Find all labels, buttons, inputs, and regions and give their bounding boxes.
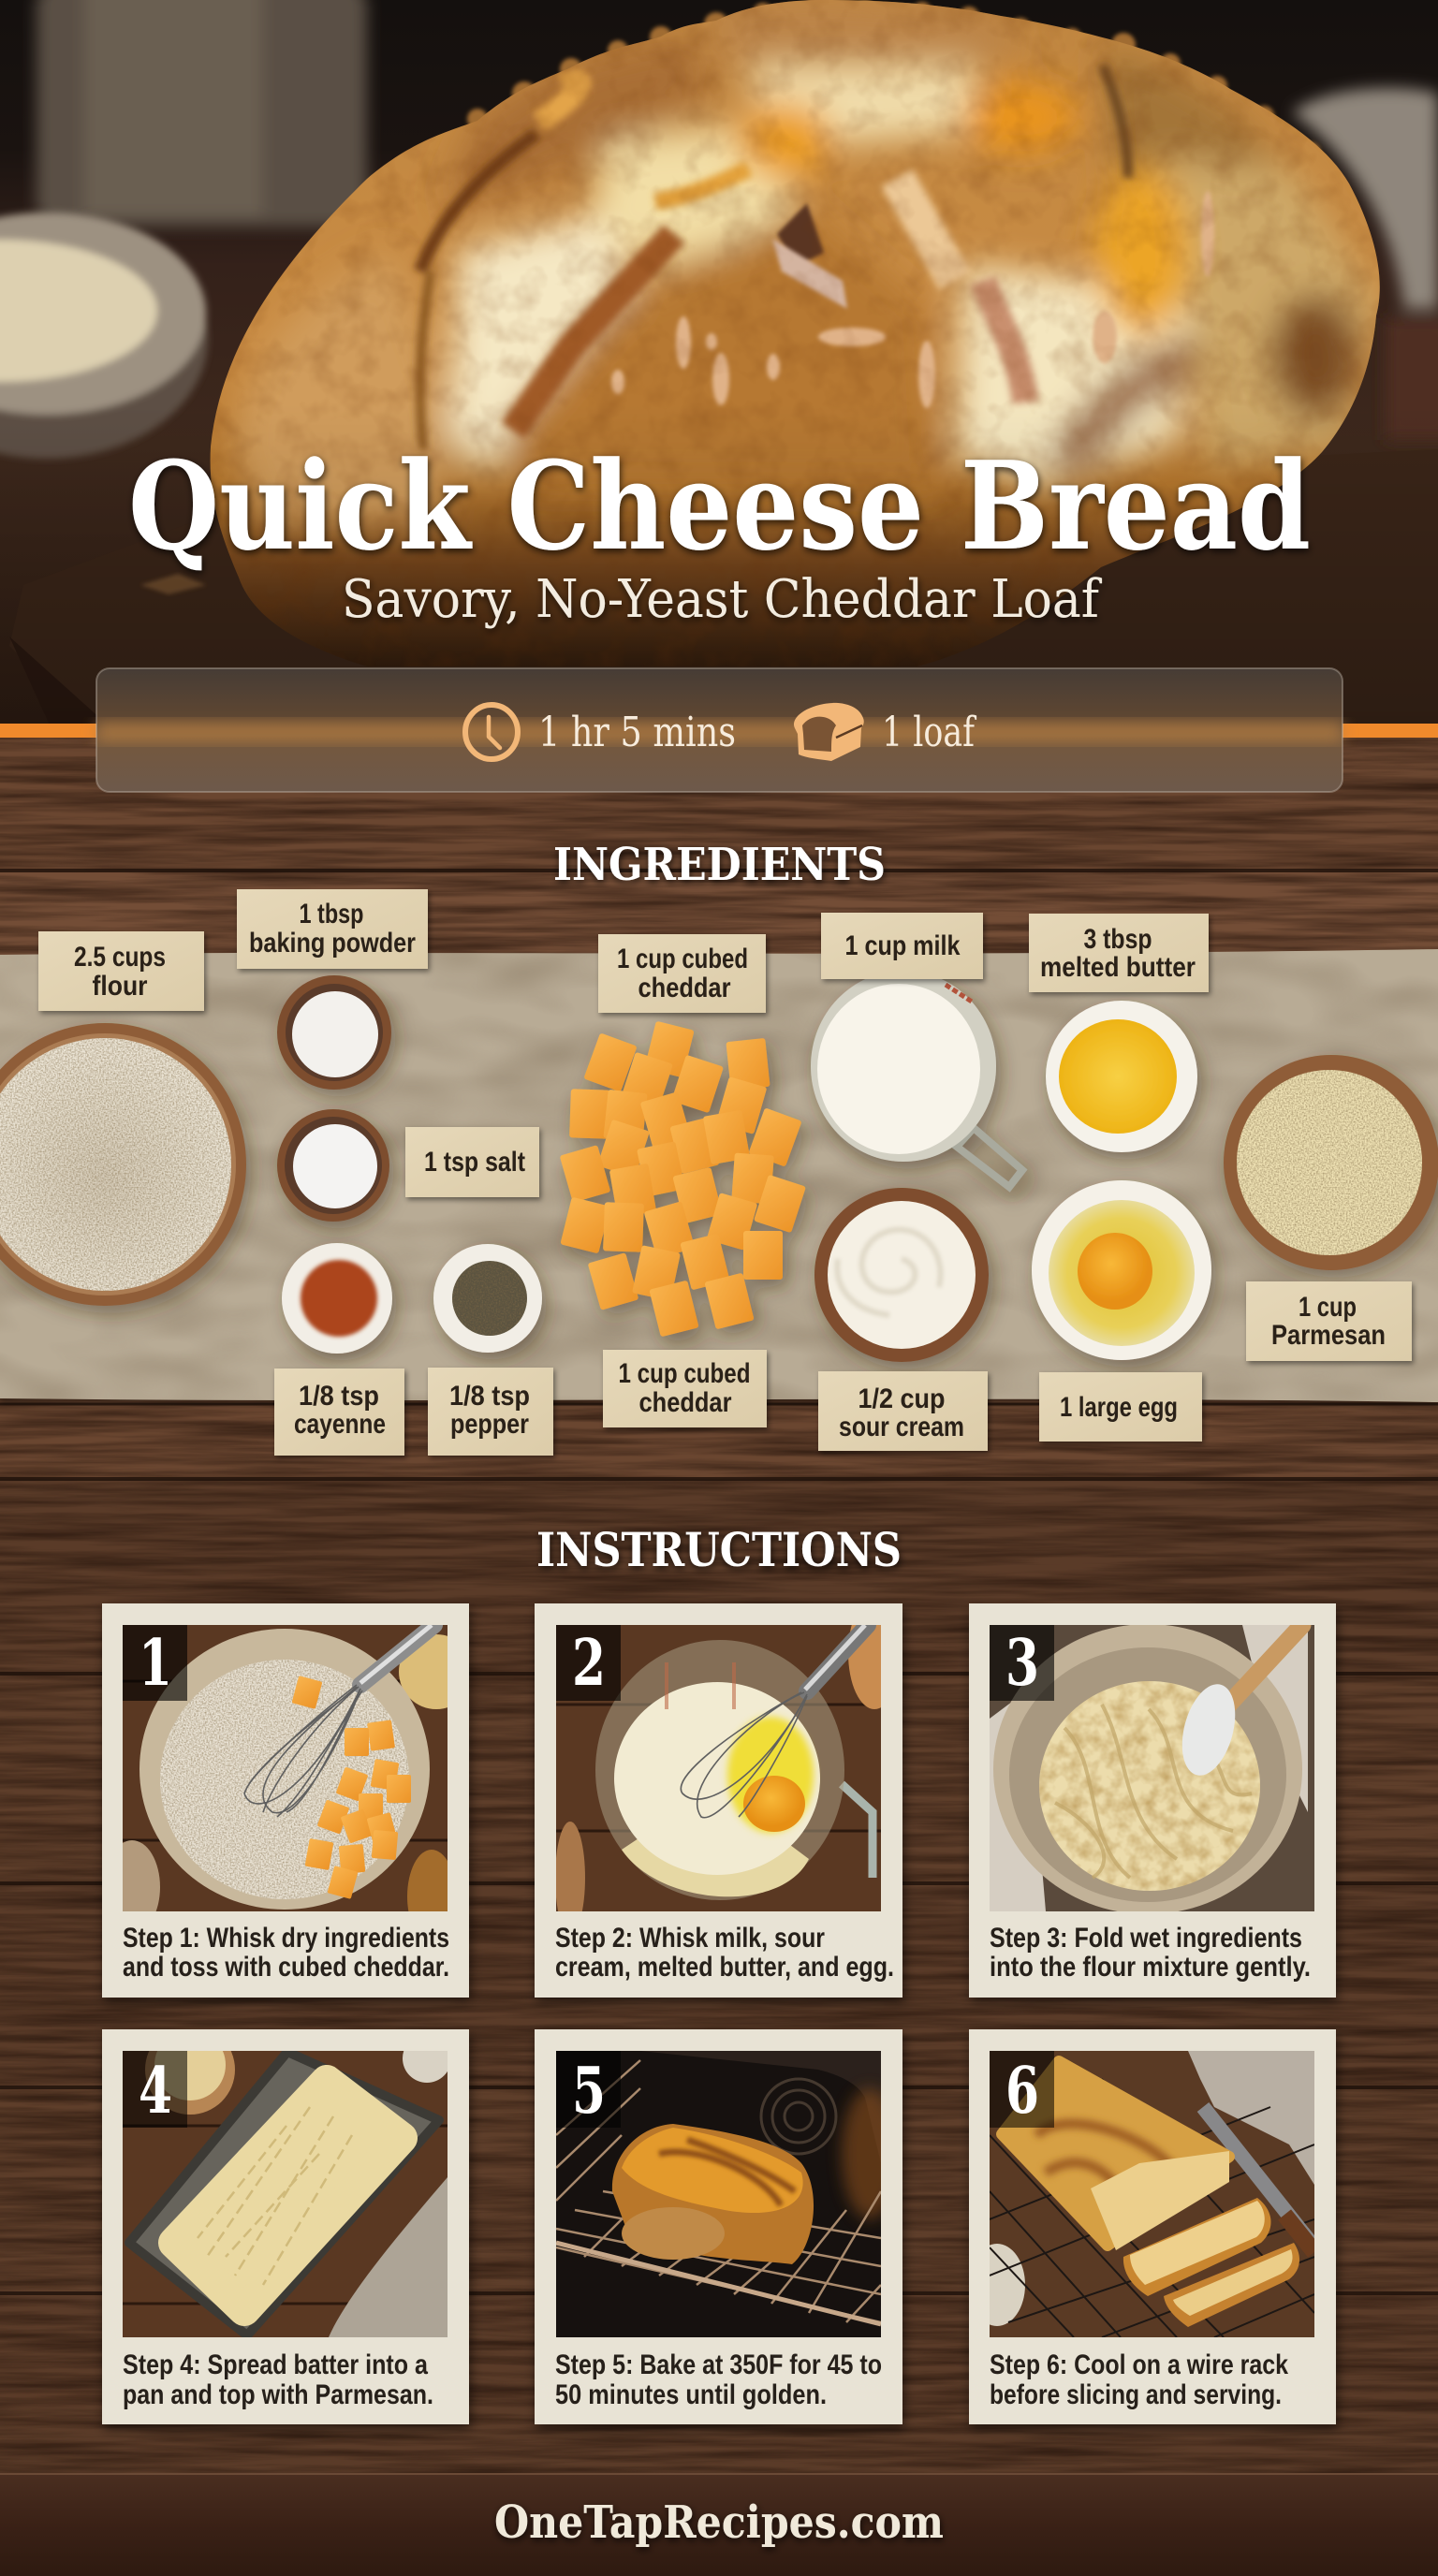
photo: batter in pan xyxy=(123,2025,451,2337)
step card 4 xyxy=(102,2025,469,2424)
subtitle: Savory, No-Yeast Cheddar Loaf xyxy=(342,569,1103,630)
label: parmesan xyxy=(1246,1281,1412,1361)
step card 5 xyxy=(535,2029,902,2424)
website: OneTapRecipes.com xyxy=(494,2496,944,2549)
number badge 4: 4 xyxy=(139,2054,172,2129)
instruction text 2: Step 2: Whisk milk, sour xyxy=(555,1923,825,1954)
ingredient: milk measuring cup xyxy=(811,971,1022,1187)
label: pepper xyxy=(428,1368,553,1456)
label: melted butter: melted butter xyxy=(1040,952,1196,983)
instruction text 5: Step 5: Bake at 350F for 45 to xyxy=(555,2349,882,2380)
prep time: 1 hr 5 mins xyxy=(538,709,736,756)
cutting board xyxy=(9,449,1438,739)
linen table runner xyxy=(0,949,1438,1404)
icon: clock xyxy=(465,705,518,759)
ingredient: sour cream bowl xyxy=(814,1188,989,1362)
label: sour cream: sour cream xyxy=(839,1412,964,1442)
ingredient: baking powder bowl xyxy=(277,975,391,1090)
label: flour: flour xyxy=(92,971,148,1002)
step card 6 xyxy=(969,2029,1336,2424)
label: milk: 1 cup milk xyxy=(844,930,961,961)
ingredient: egg bowl xyxy=(1032,1180,1211,1360)
blurred ceramic jar xyxy=(37,0,367,227)
number badge 6 xyxy=(990,2051,1054,2129)
label: parmesan: 1 cup xyxy=(1299,1292,1357,1323)
label: egg xyxy=(1039,1372,1202,1442)
label: parmesan: Parmesan xyxy=(1271,1320,1386,1351)
ingredient: cheddar cube pile xyxy=(560,1021,806,1337)
ingredient: flour bowl xyxy=(0,1023,246,1306)
instruction text 5 xyxy=(555,2349,882,2410)
instruction text 2: cream, melted butter, and egg. xyxy=(555,1952,894,1983)
number badge 3: 3 xyxy=(1005,1626,1039,1701)
label: cheddar bottom xyxy=(603,1350,767,1427)
instruction text 3 xyxy=(990,1923,1311,1983)
ingredient: cayenne bowl xyxy=(282,1243,392,1354)
label: pepper: pepper xyxy=(450,1409,529,1440)
footer band xyxy=(0,2473,1438,2576)
label: baking powder xyxy=(237,889,428,969)
ingredient: melted butter bowl xyxy=(1046,1001,1197,1152)
number badge 3 xyxy=(990,1625,1054,1701)
label: milk xyxy=(821,913,983,979)
label: sour cream xyxy=(818,1371,988,1451)
label: cayenne: 1/8 tsp xyxy=(299,1381,379,1412)
label: melted butter: 3 tbsp xyxy=(1084,924,1152,955)
photo: cooled sliced loaf xyxy=(969,2051,1314,2337)
orange accent line xyxy=(0,724,1438,738)
number badge 1: 1 xyxy=(139,1626,172,1701)
glass time and yield panel xyxy=(96,668,1343,792)
label: cheddar bottom: cheddar xyxy=(638,1387,732,1418)
label: cheddar top: cheddar xyxy=(638,973,731,1003)
number badge 1 xyxy=(123,1625,187,1701)
label: pepper: 1/8 tsp xyxy=(449,1381,530,1412)
instruction text 1 xyxy=(123,1923,449,1983)
number badge 5: 5 xyxy=(572,2054,606,2129)
instruction text 5: 50 minutes until golden. xyxy=(555,2379,827,2410)
yield: 1 loaf xyxy=(882,709,976,756)
step card 2 xyxy=(535,1597,902,1998)
instruction text 3: Step 3: Fold wet ingredients xyxy=(990,1923,1302,1954)
number badge 2 xyxy=(556,1625,621,1701)
photo: whisking flour and cheddar xyxy=(123,1625,448,1911)
instruction text 2 xyxy=(555,1923,894,1983)
instruction text 1: Step 1: Whisk dry ingredients xyxy=(123,1923,449,1954)
photo: folding dough xyxy=(990,1624,1314,1914)
instruction text 4 xyxy=(123,2349,433,2410)
label: cayenne xyxy=(274,1368,404,1456)
instruction text 6 xyxy=(990,2349,1288,2410)
instruction text 4: Step 4: Spread batter into a xyxy=(123,2349,428,2380)
step card 3 xyxy=(969,1603,1336,1998)
label: baking powder: 1 tbsp xyxy=(300,899,363,929)
icon: bread loaf xyxy=(794,703,864,761)
heading: ingredients: INGREDIENTS xyxy=(553,839,886,891)
loaf of cheese bread xyxy=(187,0,1404,674)
label: cheddar bottom: 1 cup cubed xyxy=(618,1358,751,1389)
instruction text 1: and toss with cubed cheddar. xyxy=(123,1952,449,1983)
photo: whisking wet ingredients xyxy=(556,1625,881,1911)
wood background xyxy=(0,738,1438,2479)
number badge 6: 6 xyxy=(1005,2054,1039,2129)
instruction text 3: into the flour mixture gently. xyxy=(990,1952,1311,1983)
photo: loaf in oven xyxy=(556,2051,898,2337)
napkin on right xyxy=(1292,88,1438,440)
number badge 4 xyxy=(123,2051,187,2129)
label: cheddar top: 1 cup cubed xyxy=(617,944,748,974)
label: baking powder: baking powder xyxy=(249,928,416,959)
label: melted butter xyxy=(1029,914,1209,992)
label: flour xyxy=(38,931,204,1011)
label: sour cream: 1/2 cup xyxy=(858,1383,946,1414)
label: cayenne: cayenne xyxy=(294,1409,386,1440)
crust bumps along loaf top xyxy=(467,0,1320,161)
ingredient: pepper bowl xyxy=(433,1244,542,1353)
label: cheddar top xyxy=(598,934,766,1013)
instruction text 6: Step 6: Cool on a wire rack xyxy=(990,2349,1288,2380)
instruction text 6: before slicing and serving. xyxy=(990,2379,1282,2410)
hero photo: cheese bread on wood xyxy=(0,0,1438,739)
heading: instructions: INSTRUCTIONS xyxy=(536,1522,902,1577)
label: salt xyxy=(405,1127,539,1197)
instruction text 4: pan and top with Parmesan. xyxy=(123,2379,433,2410)
label: egg: 1 large egg xyxy=(1060,1392,1178,1423)
label: flour: 2.5 cups xyxy=(74,942,166,973)
number badge 5 xyxy=(556,2051,621,2129)
ingredient: parmesan bowl xyxy=(1224,1055,1438,1270)
ingredient: salt bowl xyxy=(277,1109,389,1222)
side bowl of shredded cheese xyxy=(0,212,208,459)
step card 1 xyxy=(102,1603,474,1998)
label: salt: 1 tsp salt xyxy=(424,1147,525,1178)
number badge 2: 2 xyxy=(572,1626,606,1701)
